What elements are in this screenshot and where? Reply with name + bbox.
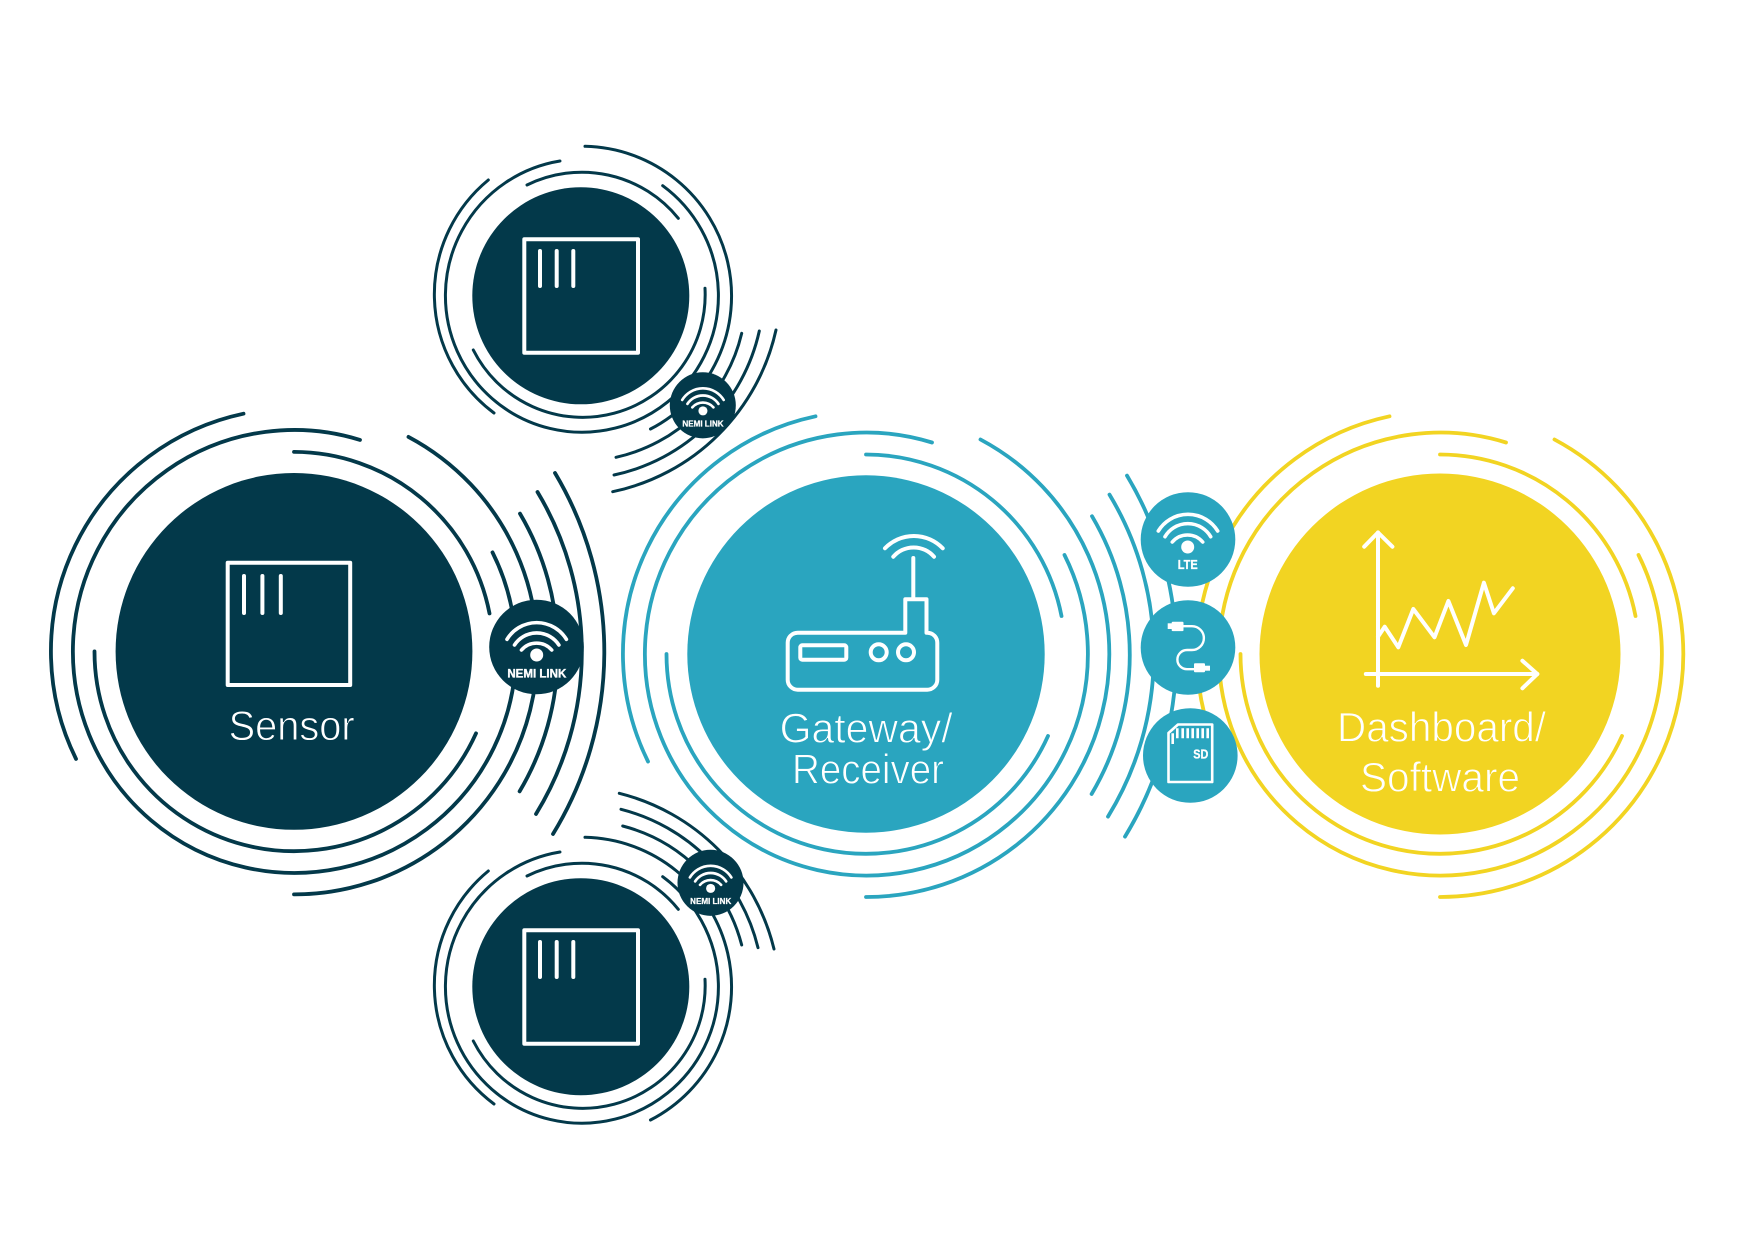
bottom sensor disc <box>472 878 689 1095</box>
panel: bottom sensor <box>434 793 774 1123</box>
panel: top sensor <box>434 146 776 492</box>
label: sensor: Sensor <box>229 702 355 749</box>
panel: gateway <box>623 416 1176 897</box>
icon: wifi <box>507 623 566 662</box>
label: dashboard: Dashboard/ <box>1337 704 1546 751</box>
bottom sensor rings <box>434 793 774 1123</box>
label: NEMI LINK: NEMI LINK <box>507 668 567 680</box>
dashboard signal rings <box>1197 416 1683 897</box>
badge: SD card <box>1143 708 1238 803</box>
icon: wifi <box>690 866 731 893</box>
NEMI disc <box>489 600 584 694</box>
SD disc <box>1143 708 1238 803</box>
icon: line chart <box>1364 532 1537 688</box>
label: SD: SD <box>1193 747 1208 761</box>
badge: NEMI link <box>489 600 584 694</box>
gateway disc <box>687 475 1045 833</box>
icon: cable <box>1168 622 1210 672</box>
icon: sensor box <box>228 563 350 685</box>
panel: sensor <box>51 414 604 894</box>
NEMI disc <box>677 850 744 916</box>
dashboard disc <box>1260 474 1620 834</box>
panel: dashboard <box>1197 416 1683 897</box>
icon: top sensor box <box>524 239 638 353</box>
icon: SD card <box>1168 724 1212 782</box>
badge: NEMI link top <box>670 372 736 438</box>
label: gateway: Gateway/ <box>780 705 953 752</box>
icon: bottom sensor box <box>524 930 638 1044</box>
NEMI disc <box>670 372 736 438</box>
label: NEMI LINK: NEMI LINK <box>682 419 724 428</box>
top sensor rings <box>434 146 776 492</box>
top sensor disc <box>472 187 689 404</box>
label: receiver: Receiver <box>792 745 944 792</box>
cable disc <box>1141 600 1235 695</box>
label: NEMI LINK: NEMI LINK <box>690 897 732 906</box>
sensor signal rings <box>51 414 604 894</box>
badge: cable <box>1141 600 1235 695</box>
icon: router <box>788 536 943 690</box>
badge: LTE <box>1141 492 1235 587</box>
label: software: Software <box>1360 754 1520 801</box>
sensor disc <box>116 473 472 830</box>
LTE disc <box>1141 492 1235 587</box>
icon: wifi <box>682 388 724 415</box>
gateway signal rings <box>623 416 1176 897</box>
icon: LTE wifi <box>1158 514 1218 554</box>
label: LTE: LTE <box>1178 558 1198 572</box>
badge: NEMI link bottom <box>677 850 744 916</box>
